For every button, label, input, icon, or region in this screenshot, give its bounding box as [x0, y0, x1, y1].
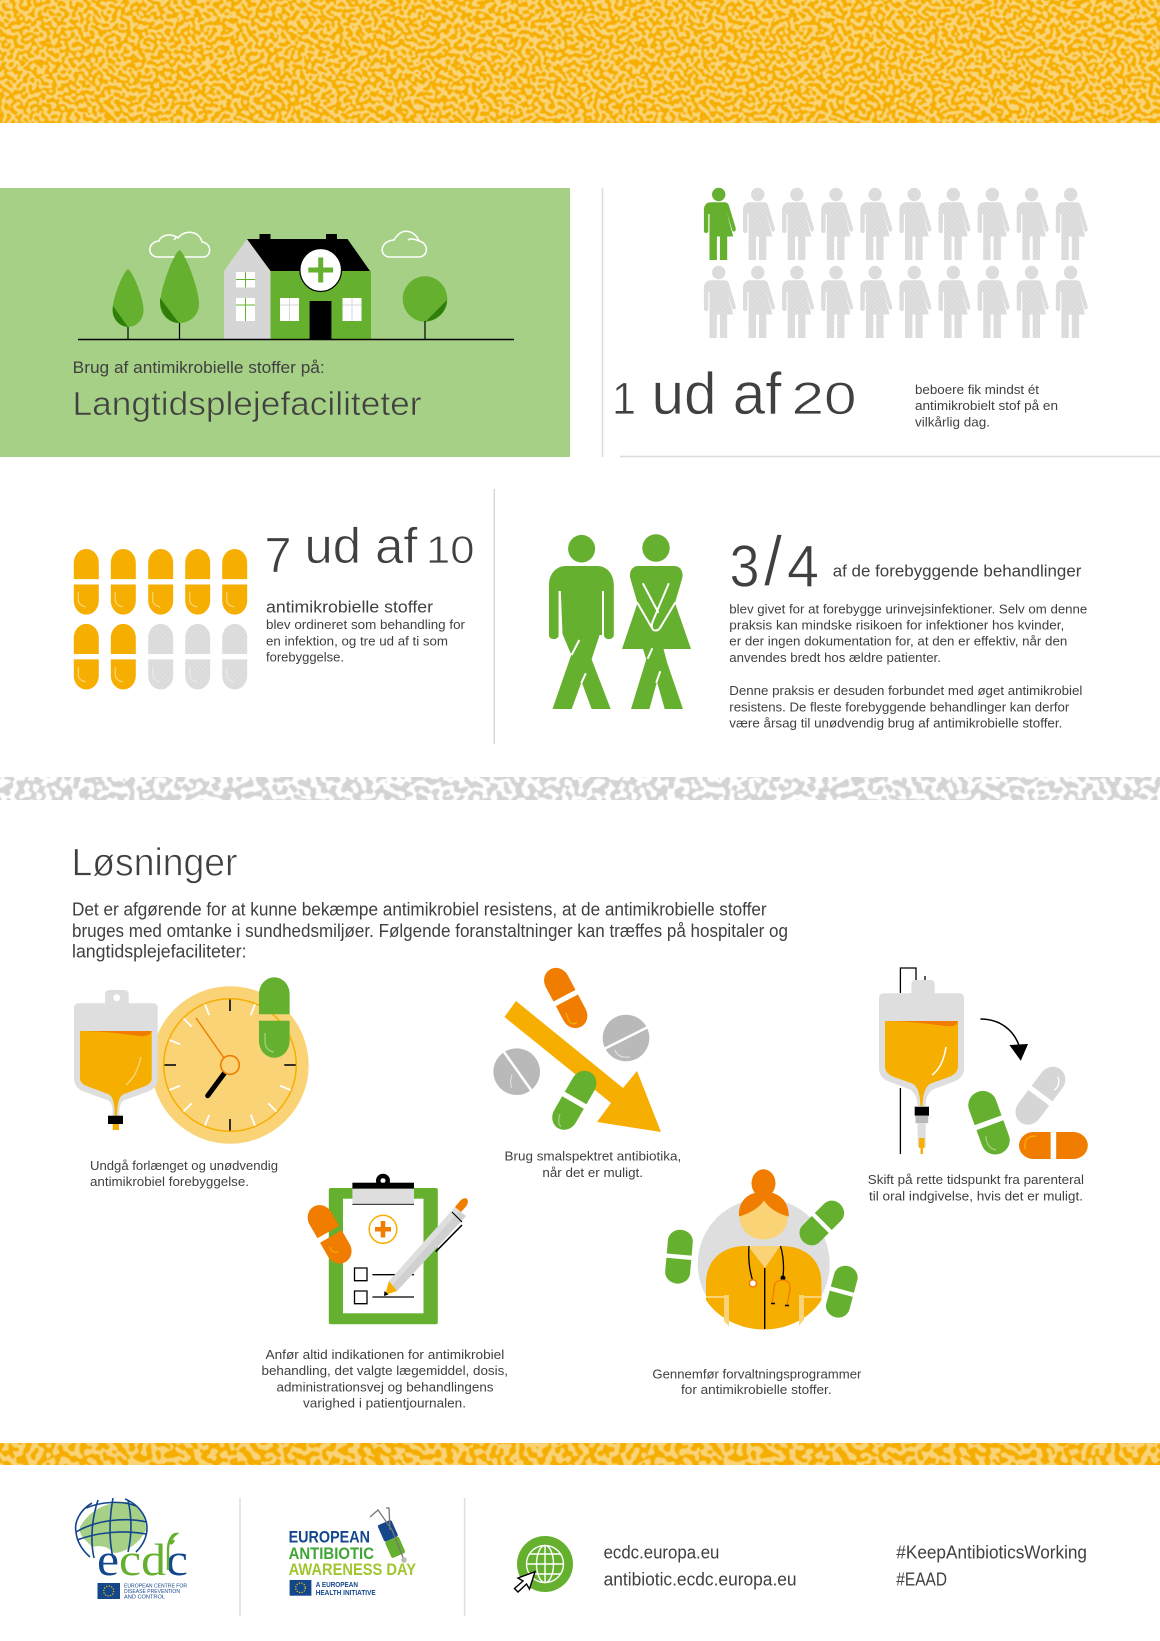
divider lines: top right stat: [602, 188, 1160, 457]
panel: title panel: [0, 188, 570, 457]
text: urinary tract paragraph: resistens. De fleste forebyggende behandlinger kan derfor: [729, 699, 1070, 714]
caption: stewardship programmes: Gennemfør forvaltningsprogrammer: [652, 1366, 862, 1381]
stat: 1 ud af 20: ud af: [652, 361, 782, 427]
text: urinary tract paragraph: [729, 601, 1087, 731]
stat: 7 ud af 10: ud af: [304, 518, 418, 574]
text: urinary tract paragraph: blev givet for at forebygge urinvejsinfektioner. Selv om denne: [729, 601, 1087, 616]
text: antibiotics treatment description: antimikrobielle stoffer: [266, 598, 433, 617]
text: urinary tract paragraph: være årsag til unødvendig brug af antimikrobielle stoffer.: [729, 716, 1062, 731]
heading: Langtidsplejefaciliteter: Langtidsplejefaciliteter: [72, 385, 422, 422]
logo: European Antibiotic Awareness Day: HEALTH INITIATIVE: [316, 1588, 376, 1597]
logo: ECDC: [76, 1498, 188, 1600]
text: antibiotics treatment description: en infektion, og tre ud af ti som: [266, 634, 448, 649]
caption: avoid prolonged prophylaxis: [90, 1158, 278, 1189]
top pattern banner: [0, 0, 1160, 123]
icon: woman figure: [622, 534, 691, 709]
text: hashtags: #EAAD: [896, 1569, 947, 1589]
text: website links: ecdc.europa.eu: [604, 1542, 719, 1562]
stat: 7 ud af 10: 7: [264, 528, 292, 584]
icon: clipboard with pen and pill: [303, 1174, 468, 1324]
text: urinary tract paragraph: Denne praksis er desuden forbundet med øget antimikrobiel: [729, 683, 1082, 698]
orange pattern band: [0, 1443, 1160, 1465]
caption: switch to oral: til oral indgivelse, hvis det er muligt.: [869, 1188, 1083, 1203]
text: of the preventive treatments: af de forebyggende behandlinger: [833, 562, 1082, 581]
logo: European Antibiotic Awareness Day: EUROPEAN: [289, 1528, 370, 1547]
caption: document indication: [262, 1347, 508, 1411]
caption: avoid prolonged prophylaxis: antimikrobiel forebyggelse.: [90, 1174, 249, 1189]
icon: arrow with pills and tablets: [493, 963, 661, 1134]
text: solutions intro: langtidsplejefaciliteter:: [72, 941, 246, 961]
vertical divider: [493, 489, 495, 744]
icon: web globe with cursor: [514, 1536, 573, 1592]
text: antibiotics treatment description: forebyggelse.: [266, 650, 344, 665]
icon: nurse with pills: [664, 1169, 860, 1330]
stat: 1 ud af 20: [612, 361, 856, 427]
stat: 1 ud af 20: 20: [792, 373, 856, 424]
caption: stewardship programmes: for antimikrobielle stoffer.: [681, 1382, 832, 1397]
caption: document indication: varighed i patientjournalen.: [303, 1396, 466, 1411]
text: website links: antibiotic.ecdc.europa.eu: [604, 1569, 797, 1589]
text: hashtags: [896, 1542, 1087, 1589]
logo: European Antibiotic Awareness Day: ANTIBIOTIC: [289, 1544, 374, 1563]
text: residents description: antimikrobielt stof på en: [915, 398, 1058, 413]
caption: switch to oral: Skift på rette tidspunkt fra parenteral: [868, 1172, 1084, 1187]
logo: ECDC: AND CONTROL: [124, 1594, 165, 1600]
caption: stewardship programmes: [652, 1366, 862, 1397]
text: panel subtitle: Brug af antimikrobielle stoffer på:: [73, 358, 325, 377]
text: urinary tract paragraph: anvendes bredt hos ældre patienter.: [729, 650, 941, 665]
caption: avoid prolonged prophylaxis: Undgå forlænget og unødvendig: [90, 1158, 278, 1173]
text: urinary tract paragraph: er der ingen dokumentation for, at den er effektiv, når den: [729, 634, 1067, 649]
stat: 3/4: [730, 522, 819, 600]
logo: ECDC: EUROPEAN CENTRE FOR: [124, 1584, 187, 1590]
caption: narrow spectrum antibiotics: [504, 1149, 681, 1180]
text: urinary tract paragraph: praksis kan mindske risikoen for infektioner hos kvinder,: [729, 617, 1064, 632]
caption: document indication: Anfør altid indikationen for antimikrobiel: [266, 1347, 504, 1362]
grey pattern band: [0, 777, 1160, 800]
text: residents description: vilkårlig dag.: [915, 415, 990, 430]
stat: 3/4: 4: [787, 534, 819, 600]
stat: 1 ud af 20: 1: [612, 373, 636, 424]
text: solutions intro: [72, 900, 788, 961]
caption: narrow spectrum antibiotics: når det er muligt.: [542, 1165, 643, 1180]
caption: switch to oral: [868, 1172, 1084, 1203]
logo: European Antibiotic Awareness Day: A EUROPEAN: [316, 1580, 358, 1589]
text: hashtags: #KeepAntibioticsWorking: [896, 1542, 1087, 1562]
icon: man figure: [549, 535, 614, 709]
logo: ECDC: DISEASE PREVENTION: [124, 1589, 180, 1595]
text: solutions intro: Det er afgørende for at kunne bekæmpe antimikrobiel resistens, at de antimikrobielle stoffer: [72, 900, 767, 920]
logo: European Antibiotic Awareness Day: [289, 1508, 417, 1597]
icon: people grid, 1 of 20 highlighted: [704, 188, 1088, 338]
icon: house scene with trees and clouds: [78, 231, 514, 340]
stat: 7 ud af 10: 10: [426, 529, 474, 572]
text: antibiotics treatment description: [266, 598, 466, 665]
text: residents description: beboere fik mindst ét: [915, 382, 1039, 397]
stat: 3/4: /: [764, 522, 783, 600]
caption: document indication: behandling, det valgte lægemiddel, dosis,: [262, 1363, 508, 1378]
caption: document indication: administrationsvej og behandlingens: [276, 1380, 494, 1395]
stat: 3/4: 3: [730, 534, 760, 600]
caption: narrow spectrum antibiotics: Brug smalspektret antibiotika,: [504, 1149, 681, 1164]
logo: European Antibiotic Awareness Day: AWARENESS DAY: [289, 1560, 417, 1579]
heading: Løsninger: Løsninger: [72, 842, 238, 885]
footer dividers: [240, 1498, 465, 1616]
text: antibiotics treatment description: blev ordineret som behandling for: [266, 617, 466, 632]
text: website links: [604, 1542, 797, 1589]
logo: ECDC: ecdc: [97, 1534, 188, 1585]
icon: capsule grid, 7 of 10 highlighted: [74, 549, 247, 690]
stat: 7 ud af 10: [264, 518, 474, 584]
icon: IV bag, clock and capsule: [74, 977, 309, 1144]
text: residents description: [915, 382, 1058, 430]
text: solutions intro: bruges med omtanke i sundhedsmiljøer. Følgende foranstaltninger kan træffes på hospitaler og: [72, 921, 788, 941]
icon: IV bag switching to oral pills: [879, 968, 1088, 1159]
